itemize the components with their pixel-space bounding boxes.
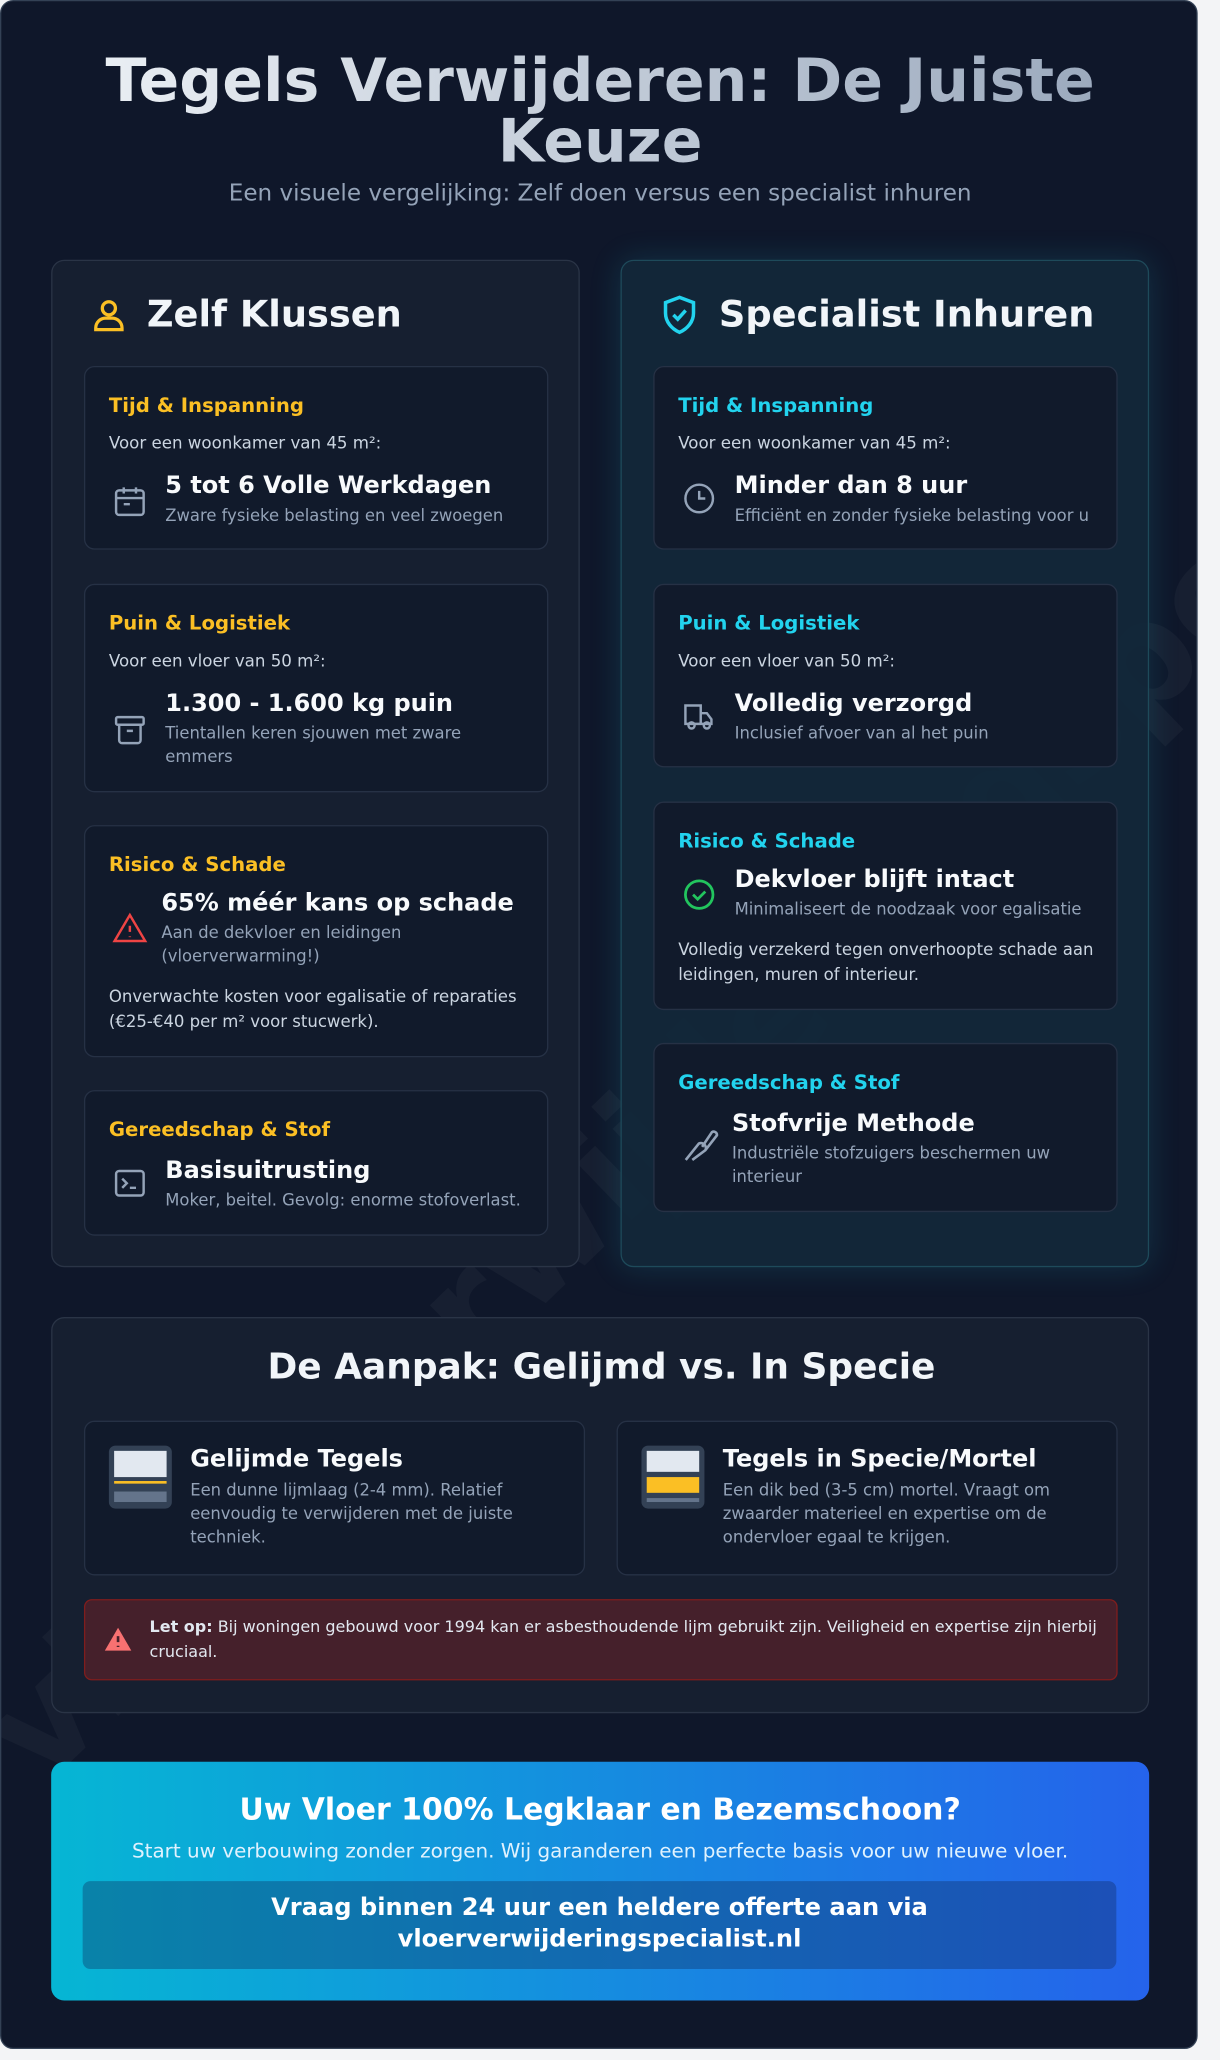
card: risico: Dekvloer blijft intact [735, 866, 1014, 893]
card: puin: Tientallen keren sjouwen met zware emmers [165, 723, 461, 766]
icon: tool [684, 1130, 718, 1161]
heading: Specialist Inhuren [719, 293, 1094, 336]
icon: warning [112, 912, 148, 942]
card: risico: 65% méér kans op schade [161, 889, 514, 917]
card: risico: Risico & Schade [109, 853, 286, 876]
card: gereedschap: Gereedschap & Stof [109, 1118, 330, 1141]
card: puin: 1.300 - 1.600 kg puin [165, 690, 453, 718]
card: puin [84, 584, 548, 792]
card: puin: Volledig verzorgd [735, 690, 972, 718]
card: risico [653, 802, 1118, 1010]
card: gereedschap: Industriële stofzuigers beschermen uw interieur [732, 1143, 1050, 1186]
card: gereedschap: Basisuitrusting [165, 1157, 370, 1185]
card: gelijmd: Een dunne lijmlaag (2-4 mm). Relatief eenvoudig te verwijderen met de juiste techniek. [190, 1480, 513, 1547]
title: Keuze [498, 105, 703, 176]
cta button: vloerverwijderingspecialist.nl [398, 1926, 801, 1953]
subtitle: Een visuele vergelijking: Zelf doen versus een specialist inhuren [229, 181, 972, 207]
card: tijd: Efficiënt en zonder fysieke belasting voor u [735, 505, 1089, 525]
heading: Zelf Klussen [147, 293, 402, 336]
title [1, 50, 1199, 171]
card: gelijmd: Gelijmde Tegels [190, 1446, 403, 1473]
icon: layers thick [641, 1446, 704, 1509]
card: puin: Inclusief afvoer van al het puin [735, 723, 989, 742]
cta heading: Uw Vloer 100% Legklaar en Bezemschoon? [239, 1793, 961, 1827]
card: tijd: Tijd & Inspanning [678, 394, 873, 417]
card: tijd: Tijd & Inspanning [109, 394, 304, 417]
card: specie: Tegels in Specie/Mortel [723, 1446, 1036, 1473]
card: tijd: Voor een woonkamer van 45 m²: [678, 433, 951, 453]
card: tijd [84, 366, 548, 550]
card: risico [84, 825, 548, 1057]
icon: terminal [114, 1170, 145, 1197]
callout: asbest warning: Let op: Bij woningen gebouwd voor 1994 kan er asbesthoudende lijm gebruikt zijn. Veiligheid en expertise zijn hierbij cruciaal. [150, 1617, 1097, 1661]
card: puin: Voor een vloer van 50 m²: [109, 651, 326, 670]
card: risico: Risico & Schade [678, 829, 855, 853]
cta text: Start uw verbouwing zonder zorgen. Wij garanderen een perfecte basis voor uw nieuwe vloer. [132, 1839, 1068, 1863]
card: specie [617, 1421, 1118, 1575]
panel: aanpak [51, 1317, 1149, 1713]
cta button [83, 1881, 1116, 1969]
card: risico: Onverwachte kosten voor egalisatie of reparaties (€25-€40 per m² voor stucwerk). [109, 986, 517, 1031]
card: gelijmd [84, 1421, 585, 1575]
card: puin: Puin & Logistiek [109, 611, 290, 635]
callout: asbest warning [84, 1599, 1118, 1680]
title: Tegels Verwijderen: De Juiste [105, 45, 1095, 115]
card: risico: Volledig verzekerd tegen onverhoopte schade aan leidingen, muren of interieur. [678, 939, 1093, 984]
card: gereedschap: Stofvrije Methode [732, 1110, 975, 1137]
card: gereedschap: Gereedschap & Stof [678, 1070, 899, 1094]
card: risico: Minimaliseert de noodzaak voor egalisatie [735, 899, 1082, 918]
card: tijd: 5 tot 6 Volle Werkdagen [165, 472, 491, 500]
heading: De Aanpak: Gelijmd vs. In Specie [267, 1347, 935, 1388]
cta [51, 1762, 1149, 2000]
icon: layers thin [109, 1446, 172, 1509]
card: tijd: Voor een woonkamer van 45 m²: [109, 433, 381, 453]
card: tijd: Zware fysieke belasting en veel zwoegen [165, 505, 503, 525]
card: gereedschap [84, 1090, 548, 1236]
icon: truck [684, 704, 713, 730]
card: puin [653, 584, 1118, 767]
card: gereedschap: Moker, beitel. Gevolg: enorme stofoverlast. [165, 1190, 521, 1209]
card: risico: Aan de dekvloer en leidingen (vloerverwarming!) [161, 922, 401, 965]
card: gereedschap [653, 1043, 1118, 1212]
cta button: Vraag binnen 24 uur een heldere offerte aan via [271, 1894, 928, 1922]
icon: clock [684, 484, 714, 514]
card: tijd [653, 366, 1118, 550]
panel: zelf klussen [51, 260, 580, 1267]
icon: check [684, 880, 714, 910]
card: puin: Voor een vloer van 50 m²: [678, 651, 895, 670]
card: tijd: Minder dan 8 uur [735, 472, 967, 500]
icon: archive [114, 716, 145, 744]
card: specie: Een dik bed (3-5 cm) mortel. Vraagt om zwaarder materieel en expertise om de ondervloer egaal te krijgen. [723, 1480, 1050, 1547]
card: puin: Puin & Logistiek [678, 611, 859, 635]
icon: calendar [114, 487, 145, 516]
panel: specialist [620, 260, 1149, 1267]
